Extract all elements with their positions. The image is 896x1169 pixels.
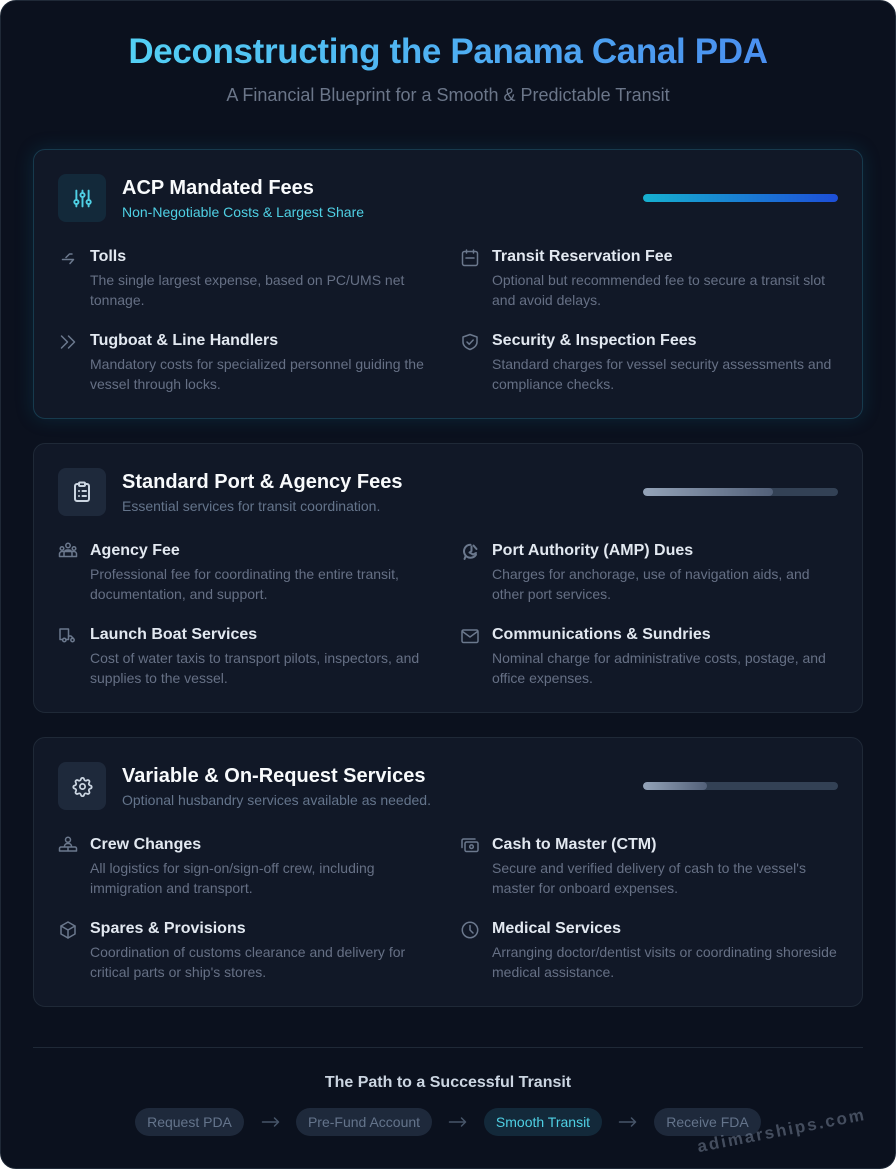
icon: gear — [58, 762, 106, 810]
step: receive FDA: Receive FDA — [666, 1114, 749, 1130]
item: launch boat services: Cost of water taxis to transport pilots, inspectors, and — [90, 650, 419, 666]
step: request PDA — [135, 1108, 244, 1136]
item: security and inspection fees: compliance checks. — [492, 376, 614, 392]
item: communications and sundries: office expenses. — [492, 670, 593, 686]
arrow — [448, 1117, 466, 1127]
icon: clipboard — [58, 468, 106, 516]
item: tolls: Tolls — [90, 248, 126, 265]
item: transit reservation fee: Optional but recommended fee to secure a transit slot — [492, 272, 825, 288]
item: port authority dues: Charges for anchorage, use of navigation aids, and — [492, 566, 810, 582]
arrow — [262, 1117, 280, 1127]
heading: ACP Mandated Fees — [122, 177, 314, 199]
item: agency fee: Professional fee for coordinating the entire transit, — [90, 566, 399, 582]
item: spares and provisions: Spares & Provisions — [90, 920, 246, 937]
item: tolls — [62, 248, 404, 308]
subtitle: A Financial Blueprint for a Smooth & Predictable Transit — [226, 85, 670, 105]
item: spares and provisions: critical parts or ship's stores. — [90, 964, 266, 980]
step: smooth transit — [484, 1108, 602, 1136]
heading: Standard Port & Agency Fees — [122, 471, 402, 493]
item: security and inspection fees — [462, 332, 831, 392]
item: cash to master: Cash to Master (CTM) — [492, 836, 656, 853]
item: transit reservation fee: Transit Reservation Fee — [492, 248, 673, 265]
step: pre-fund account — [296, 1108, 432, 1136]
item: cash to master: Secure and verified delivery of cash to the vessel's — [492, 860, 806, 876]
item: port authority dues: Port Authority (AMP) Dues — [492, 542, 693, 559]
subheading: Non-Negotiable Costs & Largest Share — [122, 204, 364, 220]
item: tugboat and line handlers: vessel through locks. — [90, 376, 221, 392]
item: crew changes: immigration and transport. — [90, 880, 253, 896]
step: smooth transit: Smooth Transit — [496, 1114, 590, 1130]
item: medical services: Medical Services — [492, 920, 621, 937]
icon: sliders — [58, 174, 106, 222]
item: transit reservation fee: and avoid delays. — [492, 292, 601, 308]
item: launch boat services: supplies to the vessel. — [90, 670, 228, 686]
item: security and inspection fees: Standard charges for vessel security assessments and — [492, 356, 831, 372]
item: tugboat and line handlers: Tugboat & Line Handlers — [90, 332, 278, 349]
item: agency fee — [58, 542, 399, 602]
item: communications and sundries — [461, 626, 826, 686]
item: tugboat and line handlers: Mandatory costs for specialized personnel guiding the — [90, 356, 424, 372]
step: receive FDA — [654, 1108, 761, 1136]
item: crew changes: All logistics for sign-on/sign-off crew, including — [90, 860, 375, 876]
item: cash to master: master for onboard expenses. — [492, 880, 678, 896]
item: medical services: medical assistance. — [492, 964, 614, 980]
item: cash to master — [461, 836, 806, 896]
heading: Variable & On-Request Services — [122, 765, 425, 787]
item: launch boat services: Launch Boat Services — [90, 626, 257, 643]
share bar — [643, 782, 838, 790]
subheading: Optional husbandry services available as needed. — [122, 792, 431, 808]
item: transit reservation fee — [462, 248, 825, 308]
item: security and inspection fees: Security & Inspection Fees — [492, 332, 697, 349]
panel: variable and on-request services — [33, 737, 863, 1007]
share bar — [643, 488, 838, 496]
item: tugboat and line handlers — [60, 332, 424, 392]
item: communications and sundries: Nominal charge for administrative costs, postage, and — [492, 650, 826, 666]
item: spares and provisions — [60, 920, 405, 980]
item: port authority dues — [463, 542, 810, 602]
item: tolls: tonnage. — [90, 292, 144, 308]
subheading: Essential services for transit coordination. — [122, 498, 380, 514]
item: tolls: The single largest expense, based on PC/UMS net — [90, 272, 404, 288]
item: medical services: Arranging doctor/dentist visits or coordinating shoreside — [492, 944, 837, 960]
panel: standard port and agency fees — [33, 443, 863, 713]
item: crew changes — [58, 836, 375, 896]
item: agency fee: Agency Fee — [90, 542, 180, 559]
item: spares and provisions: Coordination of customs clearance and delivery for — [90, 944, 405, 960]
item: medical services — [462, 920, 837, 980]
item: crew changes: Crew Changes — [90, 836, 201, 853]
footer heading: The Path to a Successful Transit — [325, 1074, 571, 1091]
title: Deconstructing the Panama Canal PDA — [128, 32, 768, 71]
item: port authority dues: other port services. — [492, 586, 611, 602]
item: launch boat services — [59, 626, 419, 686]
step: pre-fund account: Pre-Fund Account — [308, 1114, 420, 1130]
arrow — [618, 1117, 636, 1127]
share bar — [643, 194, 838, 202]
step: request PDA: Request PDA — [147, 1114, 232, 1130]
watermark: adimarships.com — [696, 1105, 867, 1156]
panel: ACP mandated fees — [33, 149, 863, 419]
item: communications and sundries: Communications & Sundries — [492, 626, 711, 643]
item: agency fee: documentation, and support. — [90, 586, 267, 602]
